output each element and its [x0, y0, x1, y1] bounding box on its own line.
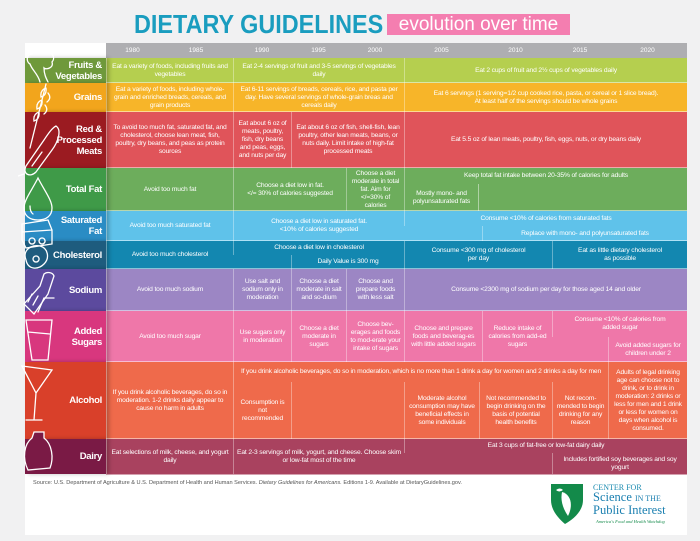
text: Grains	[74, 92, 102, 103]
row: cholesterol: Daily Value is 300 mg	[317, 258, 379, 265]
row: grains	[106, 83, 658, 112]
row: cholesterol: Avoid too much cholesterol	[132, 251, 208, 258]
row: meats: Eat about 6 oz of fish, shell-fish, lean poultry, other lean meats, beans, or nuts daily. Limit intake of high-fat processed meats	[296, 124, 400, 155]
year header: 1980	[125, 47, 140, 54]
row: dairy: Eat 2-3 servings of milk, yogurt, and cheese. Choose skim or low-fat most of the time	[237, 448, 401, 464]
logo: CSPI: CENTER FOR	[593, 483, 642, 492]
row: added sugars: Choose bev-erages and foods to mod-erate your intake of sugars	[350, 320, 401, 352]
row: alcohol: If you drink alcoholic beverages, do so in moderation. 1-2 drinks daily appear to cause no harm in adults	[113, 388, 227, 412]
row: total fat: Mostly mono- and polyunsaturated fats	[413, 190, 470, 204]
icon: sausage	[18, 126, 59, 176]
text: Red &	[76, 124, 102, 134]
row: meats: To avoid too much fat, saturated fat, and cholesterol, choose lean meat, fish, poultry, dry beans, and peas as protein sources	[113, 124, 227, 155]
logo: CSPI: Public Interest	[593, 503, 666, 517]
row: added sugars	[106, 311, 681, 362]
row: total fat: Choose a diet low in fat.	[256, 182, 324, 188]
row: sodium: Use salt and sodium only in moderation	[242, 278, 283, 301]
row labels: Vegetables	[55, 70, 102, 82]
row: cholesterol: as possible	[604, 255, 636, 262]
row: total fat: Choose a diet moderate in total fat. Aim for </=30% of calories	[352, 170, 399, 208]
row: cholesterol: Consume <300 mg of cholesterol	[432, 247, 525, 254]
row: added sugars: Avoid added sugars for children under 2	[615, 342, 681, 356]
text: Fat	[89, 226, 102, 237]
year header: 2005	[434, 47, 449, 54]
row: fruits	[106, 58, 618, 83]
row: sodium: Avoid too much sodium	[137, 286, 203, 293]
row: cholesterol	[106, 241, 662, 269]
year header	[106, 43, 687, 58]
text: Dairy	[80, 451, 102, 462]
year header: 1990	[255, 47, 269, 54]
row: alcohol: Consumption is not recommended	[240, 398, 284, 422]
row labels	[25, 58, 106, 83]
row: added sugars: Choose a diet moderate in sugars	[299, 324, 339, 348]
row labels: Fruits &	[68, 60, 102, 70]
text: Processed	[57, 134, 102, 146]
row: sodium: Choose and prepare foods with less salt	[356, 278, 395, 301]
row: alcohol: Not recom-mended to begin drinking for any reason	[557, 394, 604, 426]
title: DIETARY GUIDELINES	[134, 9, 383, 39]
row: sodium: Consume <2300 mg of sodium per day for those aged 14 and older	[451, 286, 641, 293]
year header: 1995	[311, 47, 326, 54]
row: fruits: Eat 2-4 servings of fruit and 3-5 servings of vegetables daily	[242, 62, 396, 78]
row: sodium: Choose a diet moderate in salt and so-dium	[296, 278, 342, 301]
row: cholesterol: Choose a diet low in cholesterol	[274, 244, 364, 251]
row: meats: Eat 5.5 oz of lean meats, poultry, fish, eggs, nuts, or dry beans daily	[451, 136, 641, 143]
icon: martini	[22, 366, 52, 420]
row: added sugars: Use sugars only in moderation	[240, 328, 285, 344]
row: grains: Eat 6-11 servings of breads, cereals, rice, and pasta per day. Have several servings of whole-grain breas and cereals daily	[240, 86, 398, 108]
row: alcohol: Not recommended to begin drinking on the basis of potential health benefits	[486, 394, 546, 426]
row: grains: Eat a variety of foods, including whole-grain and enriched breads, cereals, and grain products	[114, 86, 226, 108]
row: grains: At least half of the servings should be whole grains	[475, 98, 617, 104]
row: total fat: Avoid too much fat	[144, 186, 196, 192]
row: cholesterol: per day	[468, 255, 489, 262]
year header: 1985	[189, 47, 203, 54]
row: added sugars: Choose and prepare foods and beverag-es with little added sugars	[411, 324, 476, 348]
row: dairy: Includes fortified soy beverages and soy yogurt	[563, 456, 677, 470]
row: saturated fat: Replace with mono- and polyunsaturated fats	[521, 230, 649, 236]
text: Added	[74, 326, 102, 336]
row: saturated fat: Choose a diet low in saturated fat.	[271, 218, 367, 225]
year header: 2000	[368, 47, 382, 54]
row: saturated fat: <10% of calories suggested	[280, 226, 358, 233]
row: total fat: </= 30% of calories suggested	[247, 190, 333, 196]
icon: jug	[25, 432, 52, 470]
text: Saturated	[61, 215, 102, 226]
subtitle pill: evolution over time	[399, 14, 558, 35]
row: saturated fat	[106, 211, 649, 241]
row: saturated fat: Consume <10% of calories from saturated fats	[480, 214, 612, 222]
logo: CSPI	[551, 483, 666, 524]
icon: drop	[24, 178, 52, 220]
icon: salt shaker	[24, 273, 54, 314]
row: alcohol	[106, 362, 682, 439]
icon: egg	[25, 246, 47, 268]
row: total fat: Keep total fat intake between 20-35% of calories for adults	[464, 172, 628, 179]
row: fruits: Eat a variety of foods, including fruits and vegetables	[112, 62, 228, 78]
source note: Source: U.S. Department of Agriculture & U.S. Department of Health and Human Services. Dietary Guidelines for Americans. Editions 1-9. Available at DietaryGuidelines.gov.	[33, 480, 462, 486]
logo: CSPI: America's Food and Health Watchdog	[596, 519, 665, 524]
row: dairy: Eat 3 cups of fat-free or low-fat dairy daily	[488, 442, 604, 449]
row: dairy	[106, 439, 677, 474]
row: alcohol: If you drink alcoholic beverages, do so in moderation, which is no more than 1 drink a day for women and 2 drinks a day for men	[241, 368, 601, 375]
text: Cholesterol	[53, 250, 102, 260]
logo: CSPI: Science IN THE	[593, 490, 661, 504]
text: Sodium	[69, 284, 102, 296]
text: Sugars	[72, 336, 102, 348]
row: added sugars: added sugar	[602, 324, 638, 331]
row: added sugars: Consume <10% of calories from	[574, 316, 666, 323]
row backgrounds	[106, 58, 687, 83]
year header: 2010	[508, 47, 523, 54]
icon: cup with straw	[26, 298, 54, 360]
text: Meats	[77, 146, 102, 156]
row: dairy: Eat selections of milk, cheese, and yogurt daily	[111, 448, 229, 464]
year header: 2020	[640, 47, 655, 54]
row: meats: Eat about 6 oz of meats, poultry, fish, dry beans and peas, eggs, and nuts per day	[238, 120, 286, 159]
row: meats	[106, 112, 642, 168]
row: grains: Eat 6 servings (1 serving=1/2 cup cooked rice, pasta, or cereal or 1 slice bread).	[434, 90, 658, 96]
text: Total Fat	[66, 184, 102, 195]
row: added sugars: Avoid too much sugar	[139, 332, 201, 340]
year header: 2015	[573, 47, 587, 54]
icon: broccoli	[27, 49, 54, 82]
row: fruits: Eat 2 cups of fruit and 2½ cups of vegetables daily	[475, 66, 617, 74]
row: sodium	[106, 269, 641, 311]
text: Alcohol	[69, 395, 102, 406]
row: cholesterol: Eat as little dietary cholesterol	[578, 247, 662, 254]
row: saturated fat: Avoid too much saturated fat	[130, 222, 210, 229]
row: added sugars: Reduce intake of calories from add-ed sugars	[489, 324, 546, 348]
icon: wheat	[30, 84, 50, 148]
row: total fat	[106, 168, 628, 211]
row: alcohol: Adults of legal drinking age can choose not to drink, or to drink in moderation: 2 drinks or less for men and 1 drink or less for women on days when alcohol is consumed.	[614, 368, 682, 432]
row: alcohol: Moderate alcohol consumption may have beneficial effects in some individuals	[409, 394, 475, 426]
icon: cheese	[22, 220, 52, 248]
icons	[18, 56, 60, 471]
